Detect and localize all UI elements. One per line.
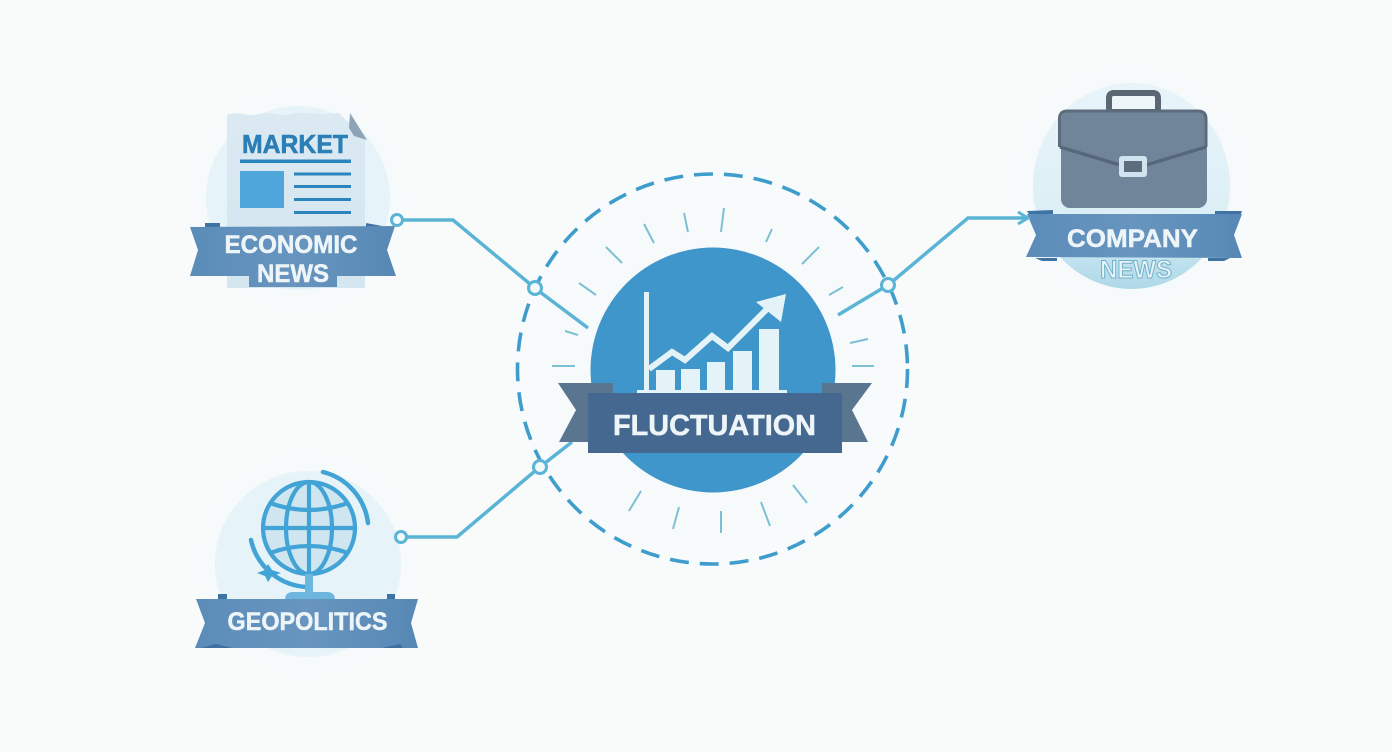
banner: geopolitics [195,594,418,648]
banner label: ECONOMIC [224,231,358,259]
banner: economic news [190,223,396,288]
connector nodes on ring [528,278,894,474]
banner label: GEOPOLITICS [228,608,388,636]
hub glow [488,144,938,594]
icon: newspaper [227,113,367,288]
connector: economic news to fluctuation [392,214,588,328]
banner label line 2: NEWS [257,260,329,288]
banner: company news [1026,210,1242,284]
node: economic news [173,75,423,325]
icon: briefcase [1060,93,1207,208]
banner label line 2: NEWS [1100,256,1172,284]
banner label: FLUCTUATION [613,410,816,442]
banner label: COMPANY [1067,225,1198,253]
icon: globe [251,472,368,600]
masthead: MARKET [242,129,348,159]
connector: geopolitics to fluctuation [396,442,572,542]
connector: company news arrow [838,212,1028,315]
radiating ticks [552,208,874,533]
node: company news [996,51,1266,321]
central hub [518,174,908,564]
dashed orbit ring [518,174,908,564]
banner: fluctuation [558,383,872,453]
node: geopolitics [183,439,433,689]
blue disc [590,248,836,492]
icon: growth chart [637,292,787,394]
